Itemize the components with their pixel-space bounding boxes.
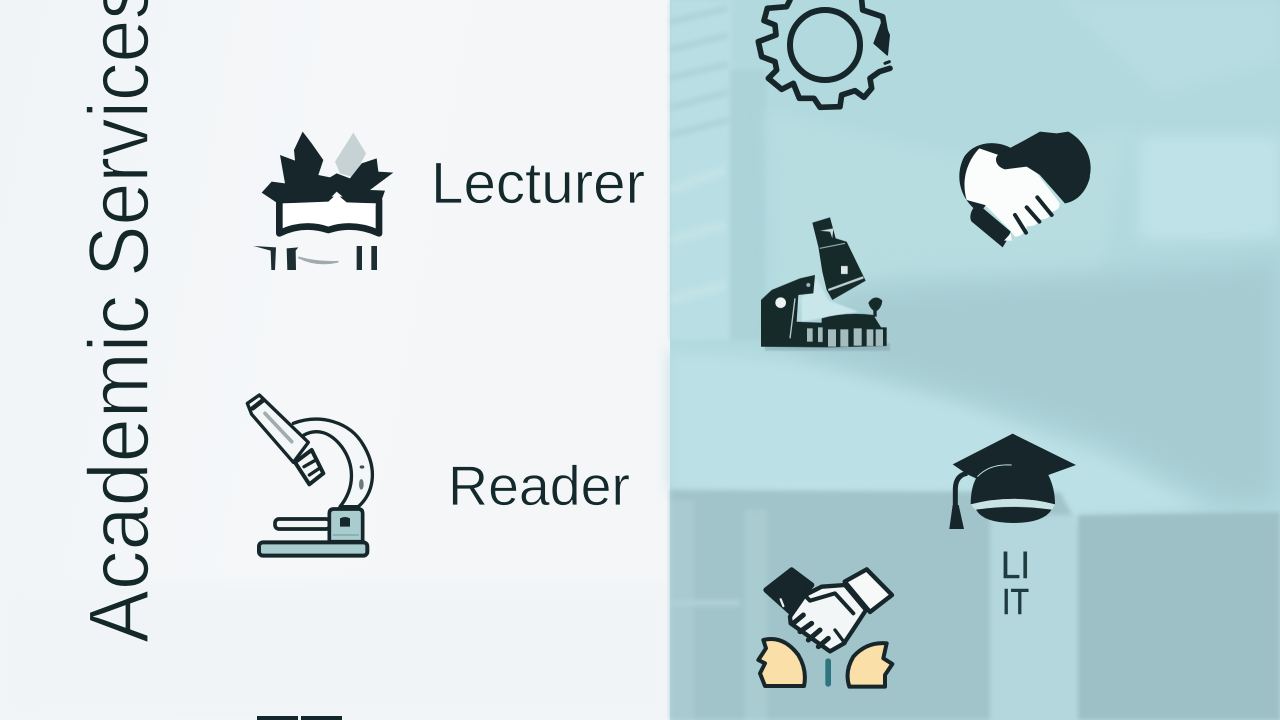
icon: handshake with two people	[758, 569, 892, 687]
icon: handshake solid	[959, 132, 1091, 247]
title: Academic Services: Academic	[72, 295, 167, 643]
icon: solid microscope	[761, 217, 890, 351]
label: Reader: Reader	[448, 454, 630, 517]
panel: left background	[0, 0, 670, 720]
label: Lecturer: Lecturer	[431, 151, 645, 216]
text mark: LI IT glyphs	[1001, 545, 1030, 622]
icon: microscope outline	[247, 395, 372, 556]
text mark: LI IT glyphs: LI	[1001, 545, 1030, 587]
icon: gear outline	[758, 0, 890, 107]
title: Academic Services	[72, 0, 167, 643]
text mark: LI IT glyphs: IT	[1002, 581, 1029, 622]
panel: right background	[670, 0, 1280, 720]
icon: graduation cap	[949, 434, 1076, 529]
icon: leaf and open book	[253, 132, 393, 270]
icon: cropped book at bottom	[257, 716, 342, 720]
